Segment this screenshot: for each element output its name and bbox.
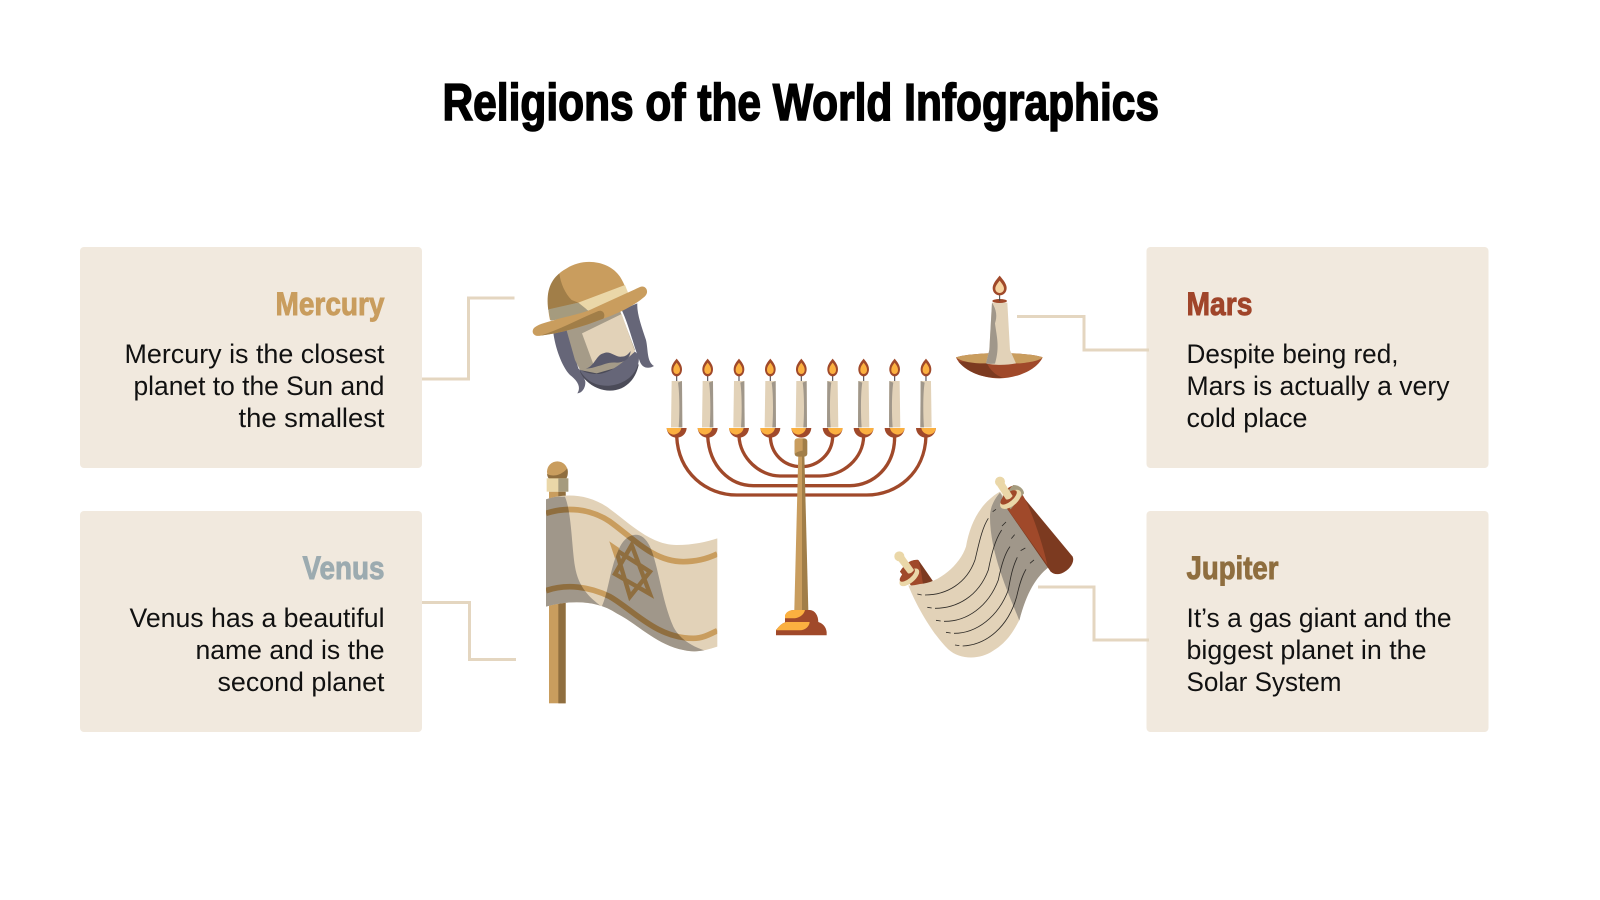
cloth: [546, 495, 717, 651]
heading: Mars: Mars: [1186, 286, 1252, 322]
sheet: [908, 492, 1048, 657]
text: Mars description: [1186, 339, 1450, 433]
connector: Mercury to hat: [422, 298, 514, 379]
base: [785, 610, 818, 623]
text: Mercury description: [124, 339, 385, 433]
stem: [794, 453, 802, 610]
lower roller: [900, 560, 933, 588]
panel: Mercury: [80, 247, 422, 468]
text: Jupiter description: biggest planet in the: [1186, 635, 1426, 665]
candles: [667, 359, 687, 438]
text: Mercury description: the smallest: [238, 403, 385, 433]
heading: Venus: Venus: [302, 550, 384, 586]
text: Jupiter description: Solar System: [1186, 667, 1342, 697]
connector: Jupiter to scroll: [1038, 587, 1149, 640]
arms: [677, 436, 926, 495]
lower roller caps: [896, 565, 922, 589]
text: Jupiter description: It’s a gas giant and the: [1186, 603, 1452, 633]
text: Mercury description: Mercury is the closest: [124, 339, 385, 369]
icon: candle on dish: [956, 276, 1043, 378]
text: Mercury description: planet to the Sun and: [134, 371, 384, 401]
text: Venus description: Venus has a beautiful: [130, 603, 384, 633]
panel: Jupiter: [1146, 511, 1488, 732]
heading: Jupiter: Jupiter: [1186, 550, 1278, 586]
text: Jupiter description: [1186, 603, 1452, 697]
panel: Mars: [1146, 247, 1488, 468]
icon: man with hat: [533, 262, 654, 393]
shaded fold: [990, 493, 1048, 621]
title: Religions of the World Infographics: [442, 74, 1159, 132]
connector: Venus to flag: [422, 602, 516, 660]
upper roller: [1003, 485, 1073, 574]
heading: Mercury: Mercury: [276, 286, 385, 322]
panel: Venus: [80, 511, 422, 732]
pole: [549, 492, 566, 703]
connector: Mars to candle: [1017, 316, 1149, 350]
icon: menorah: [667, 359, 936, 635]
text: Mars description: cold place: [1186, 403, 1308, 433]
text: Mars description: Mars is actually a very: [1186, 371, 1450, 401]
icon: flag with star: [543, 461, 720, 703]
text: Venus description: name and is the: [196, 635, 384, 665]
text lines: [917, 509, 1034, 646]
icon: scroll: [894, 477, 1073, 657]
text: Venus description: [130, 603, 385, 697]
text: Mars description: Despite being red,: [1186, 339, 1398, 369]
text: Venus description: second planet: [218, 667, 385, 697]
